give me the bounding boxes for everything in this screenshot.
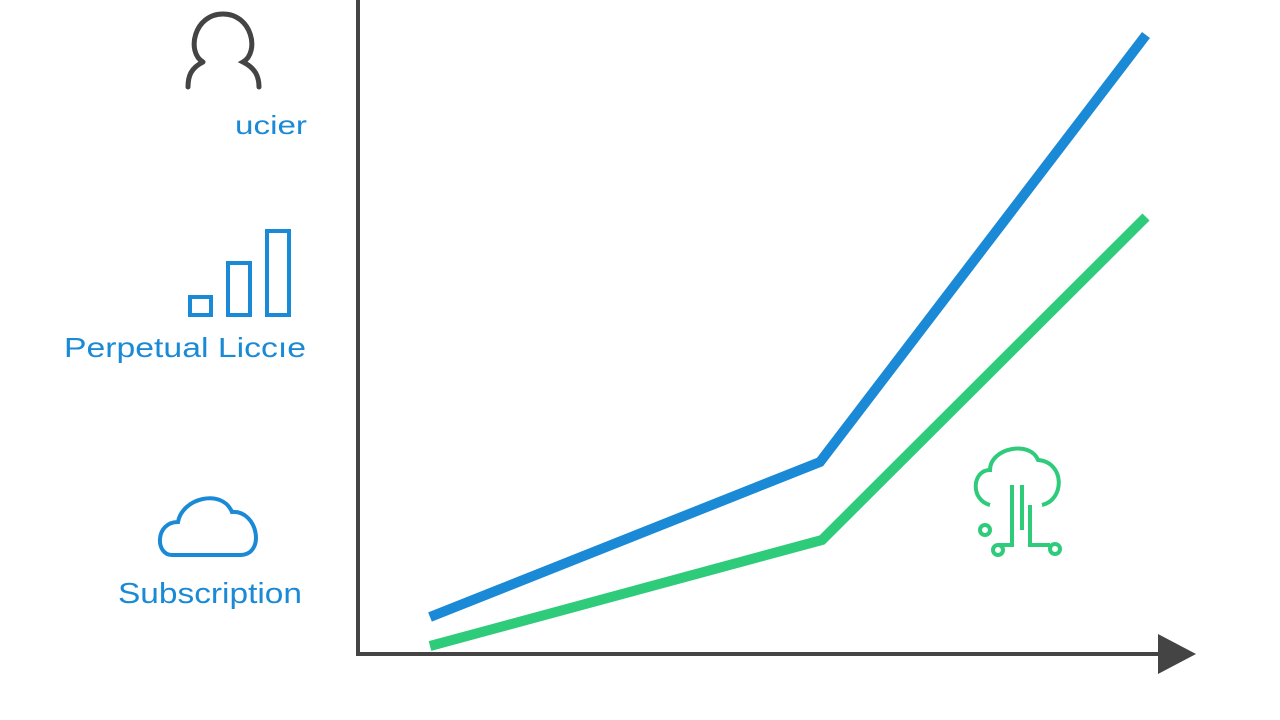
- arrow head: [1158, 634, 1196, 674]
- icon: bar chart: [190, 231, 289, 315]
- line: blue: [430, 35, 1146, 617]
- label: user: ucier: [235, 110, 307, 140]
- line: green: [430, 217, 1146, 646]
- axes: [356, 0, 1165, 654]
- icon: cloud circuit: [976, 449, 1060, 555]
- icon: user: [188, 14, 259, 87]
- label: subscription: Subscription: [118, 578, 302, 610]
- label: perpetual license: Perpetual Liccıe: [64, 332, 306, 363]
- icon: cloud: [160, 498, 256, 555]
